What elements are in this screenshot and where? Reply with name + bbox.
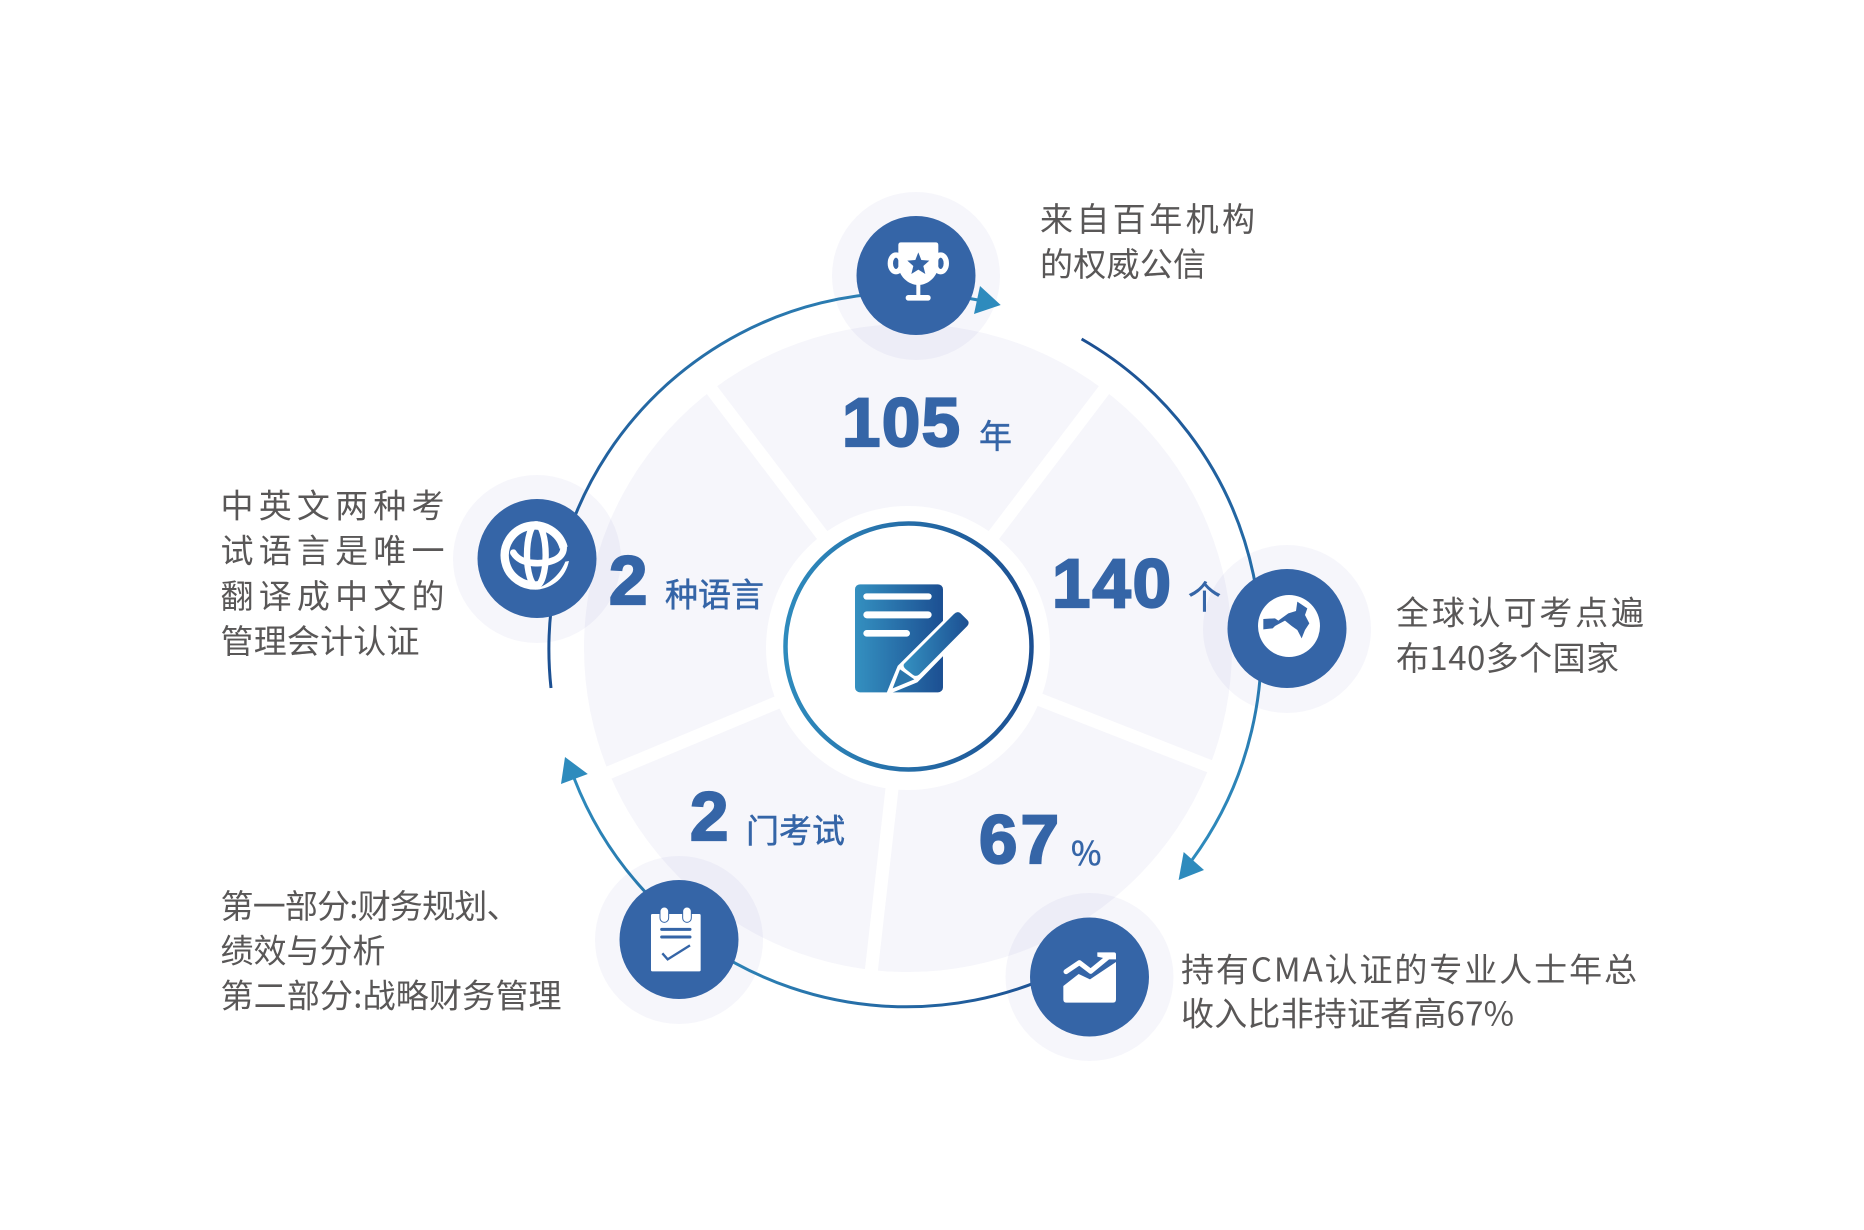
stat: 105 years: 年 [979,410,1012,458]
icon: world map badge [1228,569,1346,688]
icon: document and pen [855,584,969,693]
text: global exam sites: 全球认可考点遍 [1396,586,1644,634]
text: exam parts: 第二部分:战略财务管理 [220,970,562,1018]
stat: 2 languages [609,542,764,619]
text: two languages: 中英文两种考 [220,480,444,528]
text: two languages [220,480,444,663]
text: century-old institution: 的权威公信 [1040,238,1206,286]
text: century-old institution [1040,193,1255,286]
arc: upper right to lower right [1082,339,1261,880]
stat: 2 exams: 2 [690,778,728,855]
stat: 105 years [842,384,1012,461]
icon halos [453,192,1371,1061]
stat: 140 sites: 个 [1188,571,1221,619]
arrow: left [561,757,588,784]
stat: 2 exams: 门考试 [746,804,845,852]
text: century-old institution: 来自百年机构 [1040,193,1255,241]
stat: 2 exams [690,778,845,855]
icon: growth chart badge [1030,918,1149,1036]
icon: trophy badge [856,216,976,335]
stat: 67 percent [979,801,1101,878]
stat: 2 languages: 2 [609,542,647,619]
stat: 140 sites: 140 [1052,545,1171,622]
arrow: after trophy [974,286,1001,314]
arc: globe to trophy [549,286,1001,688]
stat: 105 years: 105 [842,384,960,461]
icon: globe badge [478,499,596,618]
text: two languages: 管理会计认证 [220,615,420,663]
arrow: lower right [1179,852,1204,880]
text: global exam sites [1396,586,1644,680]
text: income advantage [1181,944,1637,1036]
icon: notepad badge [620,880,738,999]
center circle with document icon [786,524,1032,770]
text: income advantage: 收入比非持证者高67% [1181,988,1514,1036]
text: two languages: 翻译成中文的 [220,570,444,618]
stat: 67 percent: 67 [979,801,1059,878]
text: exam parts [220,880,562,1018]
panel: segmented background disc [560,324,1260,1000]
stat: 2 languages: 种语言 [665,568,764,616]
text: exam parts: 绩效与分析 [220,924,386,972]
text: two languages: 试语言是唯一 [220,524,444,572]
stat: 67 percent: % [1071,827,1101,875]
arc: chart to notepad [710,948,1060,1007]
arc: notepad to left arrow [561,757,650,897]
text: global exam sites: 布140多个国家 [1396,632,1619,680]
text: exam parts: 第一部分:财务规划、 [220,880,520,928]
text: income advantage: 持有CMA认证的专业人士年总 [1181,944,1637,992]
